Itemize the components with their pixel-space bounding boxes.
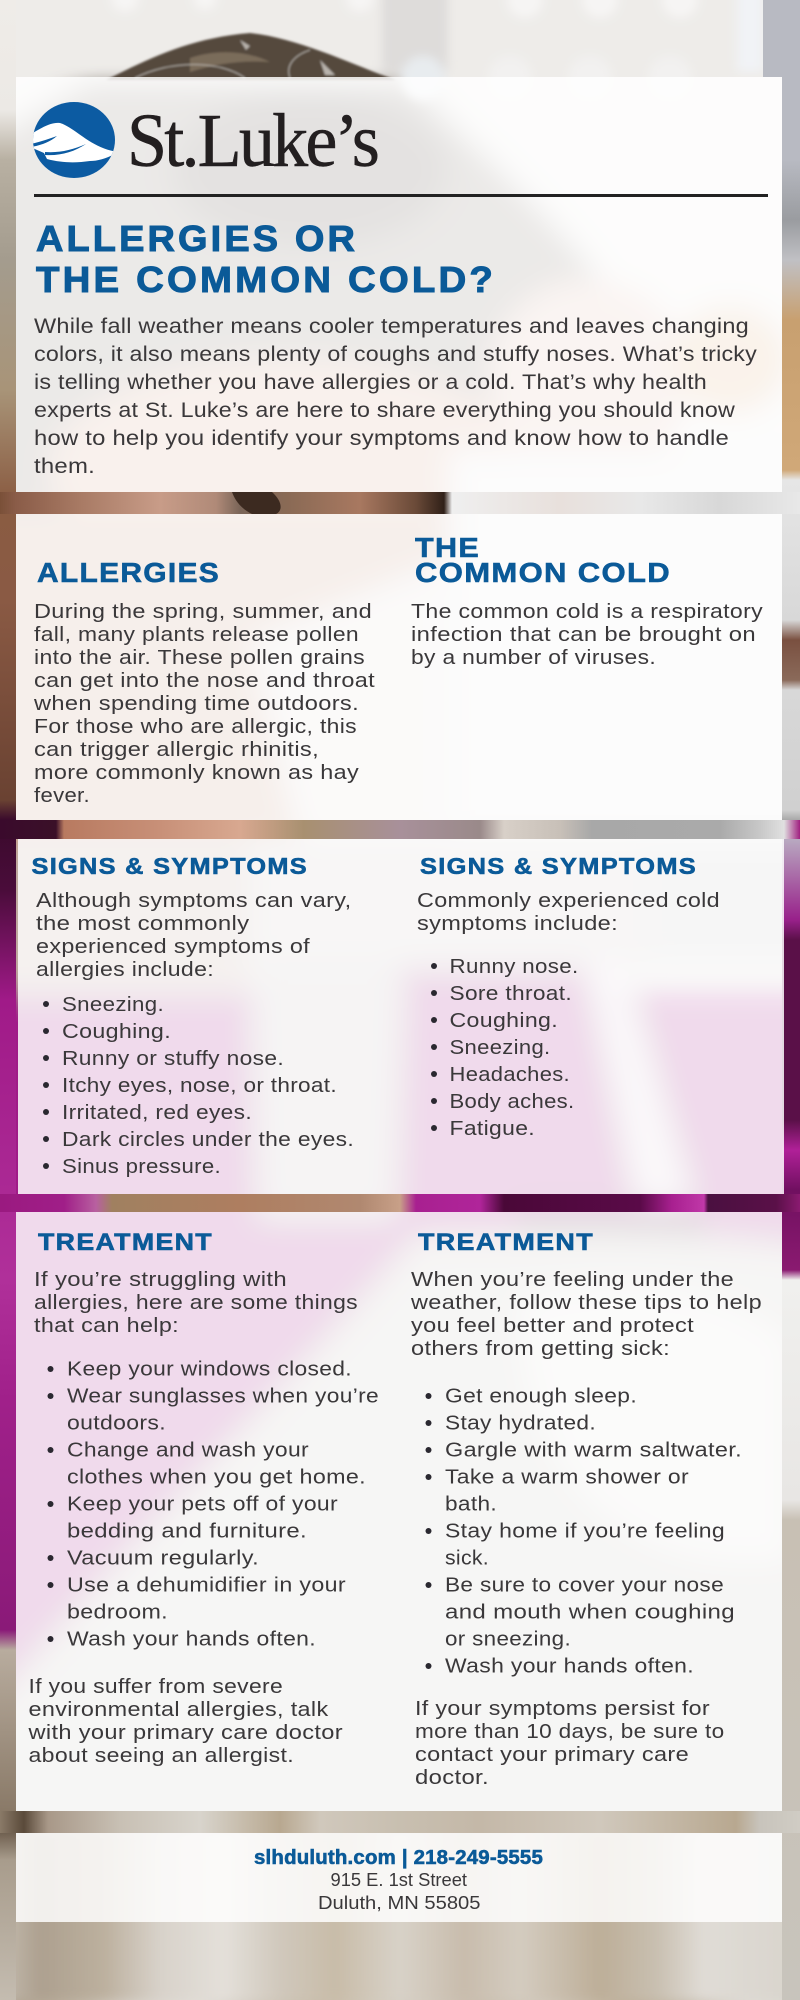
allergy symptoms list: Itchy eyes, nose, or throat.: [62, 1074, 337, 1097]
cold treatment list: Take a warm shower or: [445, 1466, 689, 1488]
allergy symptoms intro: allergies include:: [36, 958, 214, 981]
heading: Allergies: ALLERGIES: [37, 557, 220, 588]
heading: cold treatment: TREATMENT: [418, 1229, 594, 1256]
allergy treatment list: Use a dehumidifier in your: [67, 1574, 346, 1596]
allergy closing note: If you suffer from severe: [28, 1675, 283, 1698]
cold treatment list: sick.: [445, 1546, 489, 1570]
allergy closing note: environmental allergies, talk: [28, 1698, 329, 1721]
title: THE COMMON COLD?: [36, 259, 496, 300]
cold closing note: more than 10 days, be sure to: [415, 1720, 724, 1743]
cold symptoms list: Runny nose.: [450, 955, 578, 978]
logo: St. Luke's: [33, 102, 378, 178]
allergy treatment list: outdoors.: [67, 1412, 166, 1434]
intro text: [34, 315, 757, 478]
allergies definition: can trigger allergic rhinitis,: [34, 738, 319, 761]
cold closing note: doctor.: [415, 1766, 489, 1789]
allergy treatment list: [48, 1358, 379, 1650]
cold symptoms intro: Commonly experienced cold: [417, 889, 720, 912]
intro text: is telling whether you have allergies or a cold. That’s why health: [34, 371, 707, 394]
allergy treatment intro: If you’re struggling with: [34, 1268, 287, 1291]
allergy symptoms list: Dark circles under the eyes.: [62, 1128, 354, 1151]
allergy treatment list: bedroom.: [67, 1600, 168, 1624]
cold treatment intro: When you’re feeling under the: [411, 1268, 734, 1291]
common cold definition: infection that can be brought on: [411, 623, 756, 646]
cold treatment intro: weather, follow these tips to help: [410, 1291, 762, 1314]
allergy treatment list: Wash your hands often.: [67, 1628, 316, 1650]
cold closing note: contact your primary care: [415, 1743, 689, 1766]
intro text: them.: [34, 455, 95, 478]
cold treatment intro: others from getting sick:: [411, 1337, 670, 1360]
heading: The Common Cold: COMMON COLD: [415, 557, 671, 588]
allergy treatment list: Vacuum regularly.: [67, 1546, 259, 1570]
cold symptoms list: Body aches.: [450, 1090, 574, 1113]
heading: cold signs: SIGNS & SYMPTOMS: [420, 853, 697, 879]
cold closing note: If your symptoms persist for: [415, 1697, 710, 1720]
website and phone: slhduluth.com | 218-249-5555: [254, 1847, 543, 1869]
cold treatment list: and mouth when coughing: [445, 1600, 735, 1624]
allergies definition: into the air. These pollen grains: [34, 646, 365, 669]
allergies definition: when spending time outdoors.: [33, 692, 359, 715]
cold symptoms list: Headaches.: [450, 1063, 570, 1086]
title: ALLERGIES OR: [36, 218, 358, 259]
title: [36, 218, 496, 300]
allergy treatment list: bedding and furniture.: [67, 1520, 307, 1542]
allergy treatment intro: [34, 1268, 358, 1337]
cold treatment list: Be sure to cover your nose: [445, 1574, 724, 1596]
allergies definition: [33, 600, 375, 807]
street address: 915 E. 1st Street: [330, 1870, 467, 1890]
panel: treatment: [16, 1212, 782, 1811]
panel: header and intro: [16, 77, 782, 492]
heading: The Common Cold: THE: [415, 532, 480, 563]
common cold definition: by a number of viruses.: [411, 646, 656, 669]
allergy symptoms list: Coughing.: [62, 1020, 171, 1043]
allergy treatment list: Wear sunglasses when you’re: [67, 1384, 379, 1408]
city and zip: Duluth, MN 55805: [318, 1893, 480, 1913]
allergies definition: fever.: [34, 784, 90, 807]
allergy symptoms list: Sinus pressure.: [62, 1155, 221, 1178]
allergy symptoms list: Irritated, red eyes.: [62, 1101, 252, 1124]
allergy closing note: with your primary care doctor: [27, 1721, 343, 1744]
cold treatment list: Gargle with warm saltwater.: [445, 1438, 742, 1462]
allergies definition: fall, many plants release pollen: [34, 623, 359, 646]
common cold definition: [411, 600, 764, 669]
cold symptoms list: Fatigue.: [450, 1117, 535, 1140]
cold symptoms list: Sneezing.: [450, 1036, 550, 1059]
cold treatment list: [426, 1384, 742, 1678]
allergy symptoms intro: the most commonly: [36, 912, 250, 935]
allergy symptoms list: [43, 993, 354, 1178]
cold treatment list: bath.: [445, 1492, 497, 1516]
intro text: how to help you identify your symptoms and know how to handle: [34, 427, 729, 450]
eye: [232, 492, 281, 514]
intro text: colors, it also means plenty of coughs and stuffy noses. What’s tricky: [34, 343, 757, 366]
allergies definition: can get into the nose and throat: [34, 669, 375, 692]
intro text: While fall weather means cooler temperatures and leaves changing: [34, 315, 749, 338]
allergy symptoms list: Sneezing.: [62, 993, 164, 1016]
cold treatment list: Get enough sleep.: [445, 1384, 637, 1408]
cold treatment list: Wash your hands often.: [445, 1654, 694, 1678]
cold symptoms intro: [417, 889, 720, 935]
intro text: experts at St. Luke’s are here to share everything you should know: [34, 399, 736, 422]
allergies definition: more commonly known as hay: [34, 761, 359, 784]
cold closing note: [415, 1697, 724, 1789]
logo: St. Luke's: St. Luke’s: [127, 99, 377, 183]
hair crown above the panel: [106, 33, 396, 80]
allergies definition: For those who are allergic, this: [34, 715, 357, 738]
cold treatment list: or sneezing.: [445, 1628, 571, 1650]
heading: The Common Cold: [415, 532, 671, 588]
cold treatment intro: [410, 1268, 762, 1360]
panel: contact footer: [16, 1833, 782, 1922]
allergy treatment intro: allergies, here are some things: [34, 1291, 358, 1314]
panel: definitions: [16, 514, 782, 820]
allergy treatment list: clothes when you get home.: [67, 1466, 366, 1488]
allergy symptoms intro: [36, 889, 352, 981]
allergy treatment list: Keep your windows closed.: [67, 1358, 352, 1380]
allergy closing note: about seeing an allergist.: [28, 1744, 294, 1767]
cold symptoms list: Coughing.: [450, 1009, 558, 1032]
allergies definition: During the spring, summer, and: [34, 600, 372, 623]
allergy symptoms intro: experienced symptoms of: [36, 935, 310, 958]
cold symptoms list: Sore throat.: [450, 982, 572, 1005]
allergy closing note: [27, 1675, 343, 1767]
heading: allergy signs: SIGNS & SYMPTOMS: [32, 853, 308, 879]
panel: signs and symptoms: [18, 839, 784, 1194]
cold symptoms list: [431, 955, 578, 1140]
allergy symptoms intro: Although symptoms can vary,: [36, 889, 352, 912]
allergy treatment list: Change and wash your: [67, 1438, 309, 1462]
cold symptoms intro: symptoms include:: [417, 912, 618, 935]
cold treatment list: Stay home if you’re feeling: [445, 1520, 725, 1542]
cold treatment intro: you feel better and protect: [411, 1314, 694, 1337]
cold treatment list: Stay hydrated.: [445, 1412, 596, 1434]
allergy treatment intro: that can help:: [34, 1314, 179, 1337]
heading: allergy treatment: TREATMENT: [38, 1229, 213, 1256]
allergy symptoms list: Runny or stuffy nose.: [62, 1047, 284, 1070]
common cold definition: The common cold is a respiratory: [411, 600, 764, 623]
allergy treatment list: Keep your pets off of your: [67, 1492, 338, 1516]
